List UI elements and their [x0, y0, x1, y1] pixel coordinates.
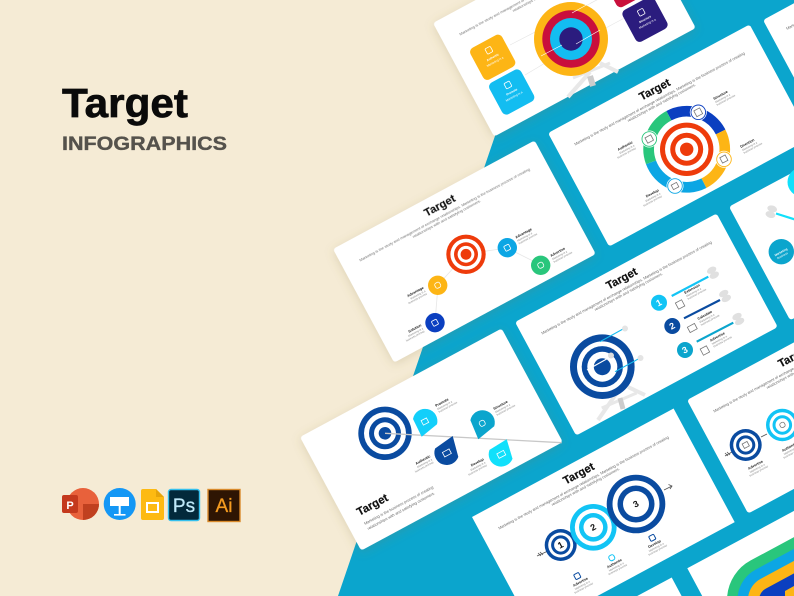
card: yellow: [468, 33, 517, 82]
icon: Photoshop: Ps: [173, 496, 195, 517]
labels: Structure: [493, 400, 509, 411]
subheading: INFOGRAPHICS: INFOGRAPHICS: [62, 134, 227, 155]
labels: business process: [553, 250, 573, 264]
target stand: [598, 387, 645, 420]
card background: Marketing is the study and management of exchange relationships. Marketing is the business process of creating: [540, 240, 713, 335]
navy target: [570, 334, 635, 399]
labels: Authentic: [617, 140, 633, 152]
panel: slide with two small targets at right edge: [687, 291, 794, 514]
labels with icons: business process: [574, 581, 594, 595]
dart step 2: Calculate: [697, 310, 713, 321]
card: yellow: Marketing is a: [486, 55, 505, 68]
labels: Marketing is a: [749, 462, 766, 474]
card background: relationships with and satisfying customers.: [593, 271, 664, 312]
dart step 3: Marketing is a: [711, 334, 728, 346]
card: navy: Marketing is a: [638, 17, 657, 30]
labels: Solution: [408, 323, 422, 334]
labels: Authentic: [415, 454, 431, 466]
teal circle: Marketing: [774, 247, 788, 257]
card: yellow: Authentic: [486, 52, 500, 62]
card: navy: Structure: [638, 14, 652, 24]
arrow shaft and fletching: [537, 484, 672, 556]
target 1: 1: [556, 539, 565, 551]
card background: Marketing is the study and management of exchange relationships. Marketing is the business process of creating: [358, 167, 531, 262]
title block: Marketing is the business process of creating: [363, 484, 434, 526]
red target: [660, 123, 713, 176]
labels: Develop: [645, 188, 659, 199]
dart step 2: 2: [668, 320, 677, 332]
panel: slide with navy target and three darts: [515, 213, 778, 436]
card background: [333, 140, 596, 363]
labels: business process: [438, 400, 458, 414]
card background: Target: [637, 77, 673, 103]
labels: [411, 394, 516, 477]
card background: Marketing is the study and management of exchange relationships. Marketing is the business process of creating: [573, 51, 746, 146]
dart step 1: 1: [654, 297, 663, 308]
labels: Advertise: [747, 459, 764, 471]
icon: Keynote: [104, 488, 136, 520]
dart: [765, 204, 794, 220]
dart step 2: [664, 288, 732, 334]
labels: Marketing is a: [619, 143, 636, 155]
dart step 1: [651, 265, 720, 311]
cyan circle: [788, 168, 794, 196]
card: crimson: [602, 0, 650, 9]
cyan target: [766, 409, 794, 441]
dots with icons: [425, 238, 550, 332]
labels: Marketing is a: [516, 231, 533, 243]
labels: business process: [405, 329, 426, 343]
labels with icons: Marketing is a: [608, 561, 625, 573]
card background: relationships with and satisfying customers.: [411, 198, 482, 239]
icon: PowerPoint: P: [66, 500, 74, 512]
dart step 3: Advertise: [709, 331, 726, 343]
slide heading and description: Marketing is the study and management of exchange relationships. Marketing is the business process of creating: [497, 435, 670, 530]
teardrop: authentic: [434, 436, 458, 465]
labels: Structure: [713, 90, 729, 101]
card background: [729, 98, 794, 320]
labels: Marketing is a: [416, 457, 433, 469]
panel: slide with rounded concentric shape: [687, 511, 794, 596]
labels with icons: business process: [648, 543, 668, 557]
labels: Marketing is a: [551, 249, 568, 261]
dart step 2: Marketing is a: [699, 312, 716, 324]
rounded concentric rings: [727, 537, 794, 596]
icon: Illustrator: Ai: [216, 496, 232, 517]
card background: [548, 24, 794, 247]
target 3: [607, 475, 665, 533]
title block: relationships with and satisfying customers.: [366, 490, 436, 531]
dart step 3: 3: [680, 344, 689, 356]
panel: slide with segmented ring and red target: [548, 24, 794, 247]
panel: slide with red target and four dots: [333, 140, 596, 363]
panel: slide at bottom edge: [637, 578, 682, 596]
labels: Marketing is a: [645, 191, 662, 203]
labels: Marketing is a: [741, 140, 758, 152]
labels: [402, 226, 573, 343]
target 2: [570, 504, 617, 551]
labels: Direction: [740, 138, 755, 149]
card background: [687, 291, 794, 514]
labels: Marketing is a: [470, 460, 487, 472]
labels: business process: [642, 194, 663, 208]
labels with icons: Authentic: [606, 558, 623, 569]
card background: [515, 213, 778, 436]
labels: Marketing is a: [714, 92, 731, 104]
dart step 2: business process: [700, 313, 721, 327]
labels: business process: [496, 403, 516, 417]
labels with icons: Advertise: [572, 576, 589, 588]
labels with icons: Develop: [647, 539, 662, 549]
card background: [763, 0, 794, 134]
card: blue: [487, 68, 536, 116]
arrow and connector: [725, 434, 767, 456]
connector lines: [510, 0, 630, 75]
darts in target: [587, 326, 644, 372]
labels: business process: [716, 93, 736, 107]
navy target: [730, 429, 762, 461]
labels: business process: [749, 464, 769, 478]
teardrop: develop: [489, 439, 512, 467]
target stand: [568, 63, 618, 97]
icon row: software logos: [62, 488, 240, 522]
labels: Develop: [470, 457, 484, 468]
labels: Promote: [435, 397, 449, 408]
navy target: [358, 407, 412, 460]
panel: slide with four square cards and crimson target: [433, 0, 696, 137]
labels: business process: [518, 232, 538, 245]
card: blue: Promote: [505, 87, 518, 97]
labels: Marketing is a: [407, 326, 424, 338]
target 1: [545, 529, 577, 561]
icon: Google Slides: [141, 489, 164, 520]
card: navy: [621, 0, 669, 44]
teal circle: business: [776, 251, 789, 260]
icon: Photoshop: [168, 490, 200, 520]
red target: [446, 235, 486, 274]
labels: Marketing is a: [436, 399, 453, 411]
labels: business process: [616, 146, 637, 160]
panel: slide with three growing numbered targets: [472, 408, 735, 596]
labels: business process: [414, 460, 435, 474]
card background: Target: [422, 193, 458, 219]
card background: [433, 0, 696, 137]
panel: slide with target and teardrops: [300, 328, 563, 551]
card: blue: Marketing is a: [505, 90, 524, 103]
icon: Illustrator: [208, 490, 240, 522]
heading: Target: Target: [62, 80, 188, 126]
labels: Advantage: [515, 227, 533, 239]
card background: [300, 328, 563, 551]
labels: [745, 440, 794, 478]
labels: business process: [467, 463, 488, 477]
dart step 3: [677, 311, 746, 358]
title block: Target: [355, 492, 391, 519]
labels: Marketing is a: [410, 289, 427, 300]
labels: Advantage: [406, 286, 424, 298]
labels with icons: business process: [608, 562, 628, 576]
background: blue diagonal panel: [338, 0, 794, 596]
dart step 1: business process: [687, 287, 707, 301]
icon: PowerPoint: [62, 488, 99, 520]
card background: [472, 408, 735, 596]
dart step 1: Extension: [684, 283, 701, 295]
labels: Advertise: [550, 247, 566, 258]
badge icons on ring: [641, 104, 732, 194]
slide heading and description: relationships with and satisfying customers.: [550, 466, 621, 507]
dart step 3: business process: [712, 335, 733, 348]
dart step 1: Marketing is a: [685, 286, 702, 298]
connector lines: [435, 248, 541, 323]
labels: business process: [407, 291, 428, 305]
teardrop: structure: [470, 410, 495, 439]
teal circle: [769, 239, 794, 264]
labels with icons: Marketing is a: [648, 541, 665, 553]
card background: relationships with and satisfying customers.: [626, 82, 697, 123]
panel: slide with dart and teal circle at right edge: [729, 98, 794, 320]
labels with icons: Marketing is a: [574, 579, 591, 591]
labels with icons: [570, 534, 668, 595]
target: yellow crimson blue navy: [534, 2, 608, 76]
labels: Marketing is a: [494, 402, 511, 414]
panel: slide at top-right corner: [763, 0, 794, 134]
target 2: 2: [589, 522, 598, 533]
card background: Target: [604, 266, 640, 292]
card background: [687, 511, 794, 596]
segmented ring: [649, 111, 725, 187]
dart shaft: [385, 433, 562, 443]
slide heading and description: Target: [561, 461, 597, 487]
labels: business process: [743, 141, 763, 155]
target 3: 3: [631, 498, 640, 510]
teardrop: promote: [413, 409, 437, 437]
labels: [613, 87, 763, 208]
